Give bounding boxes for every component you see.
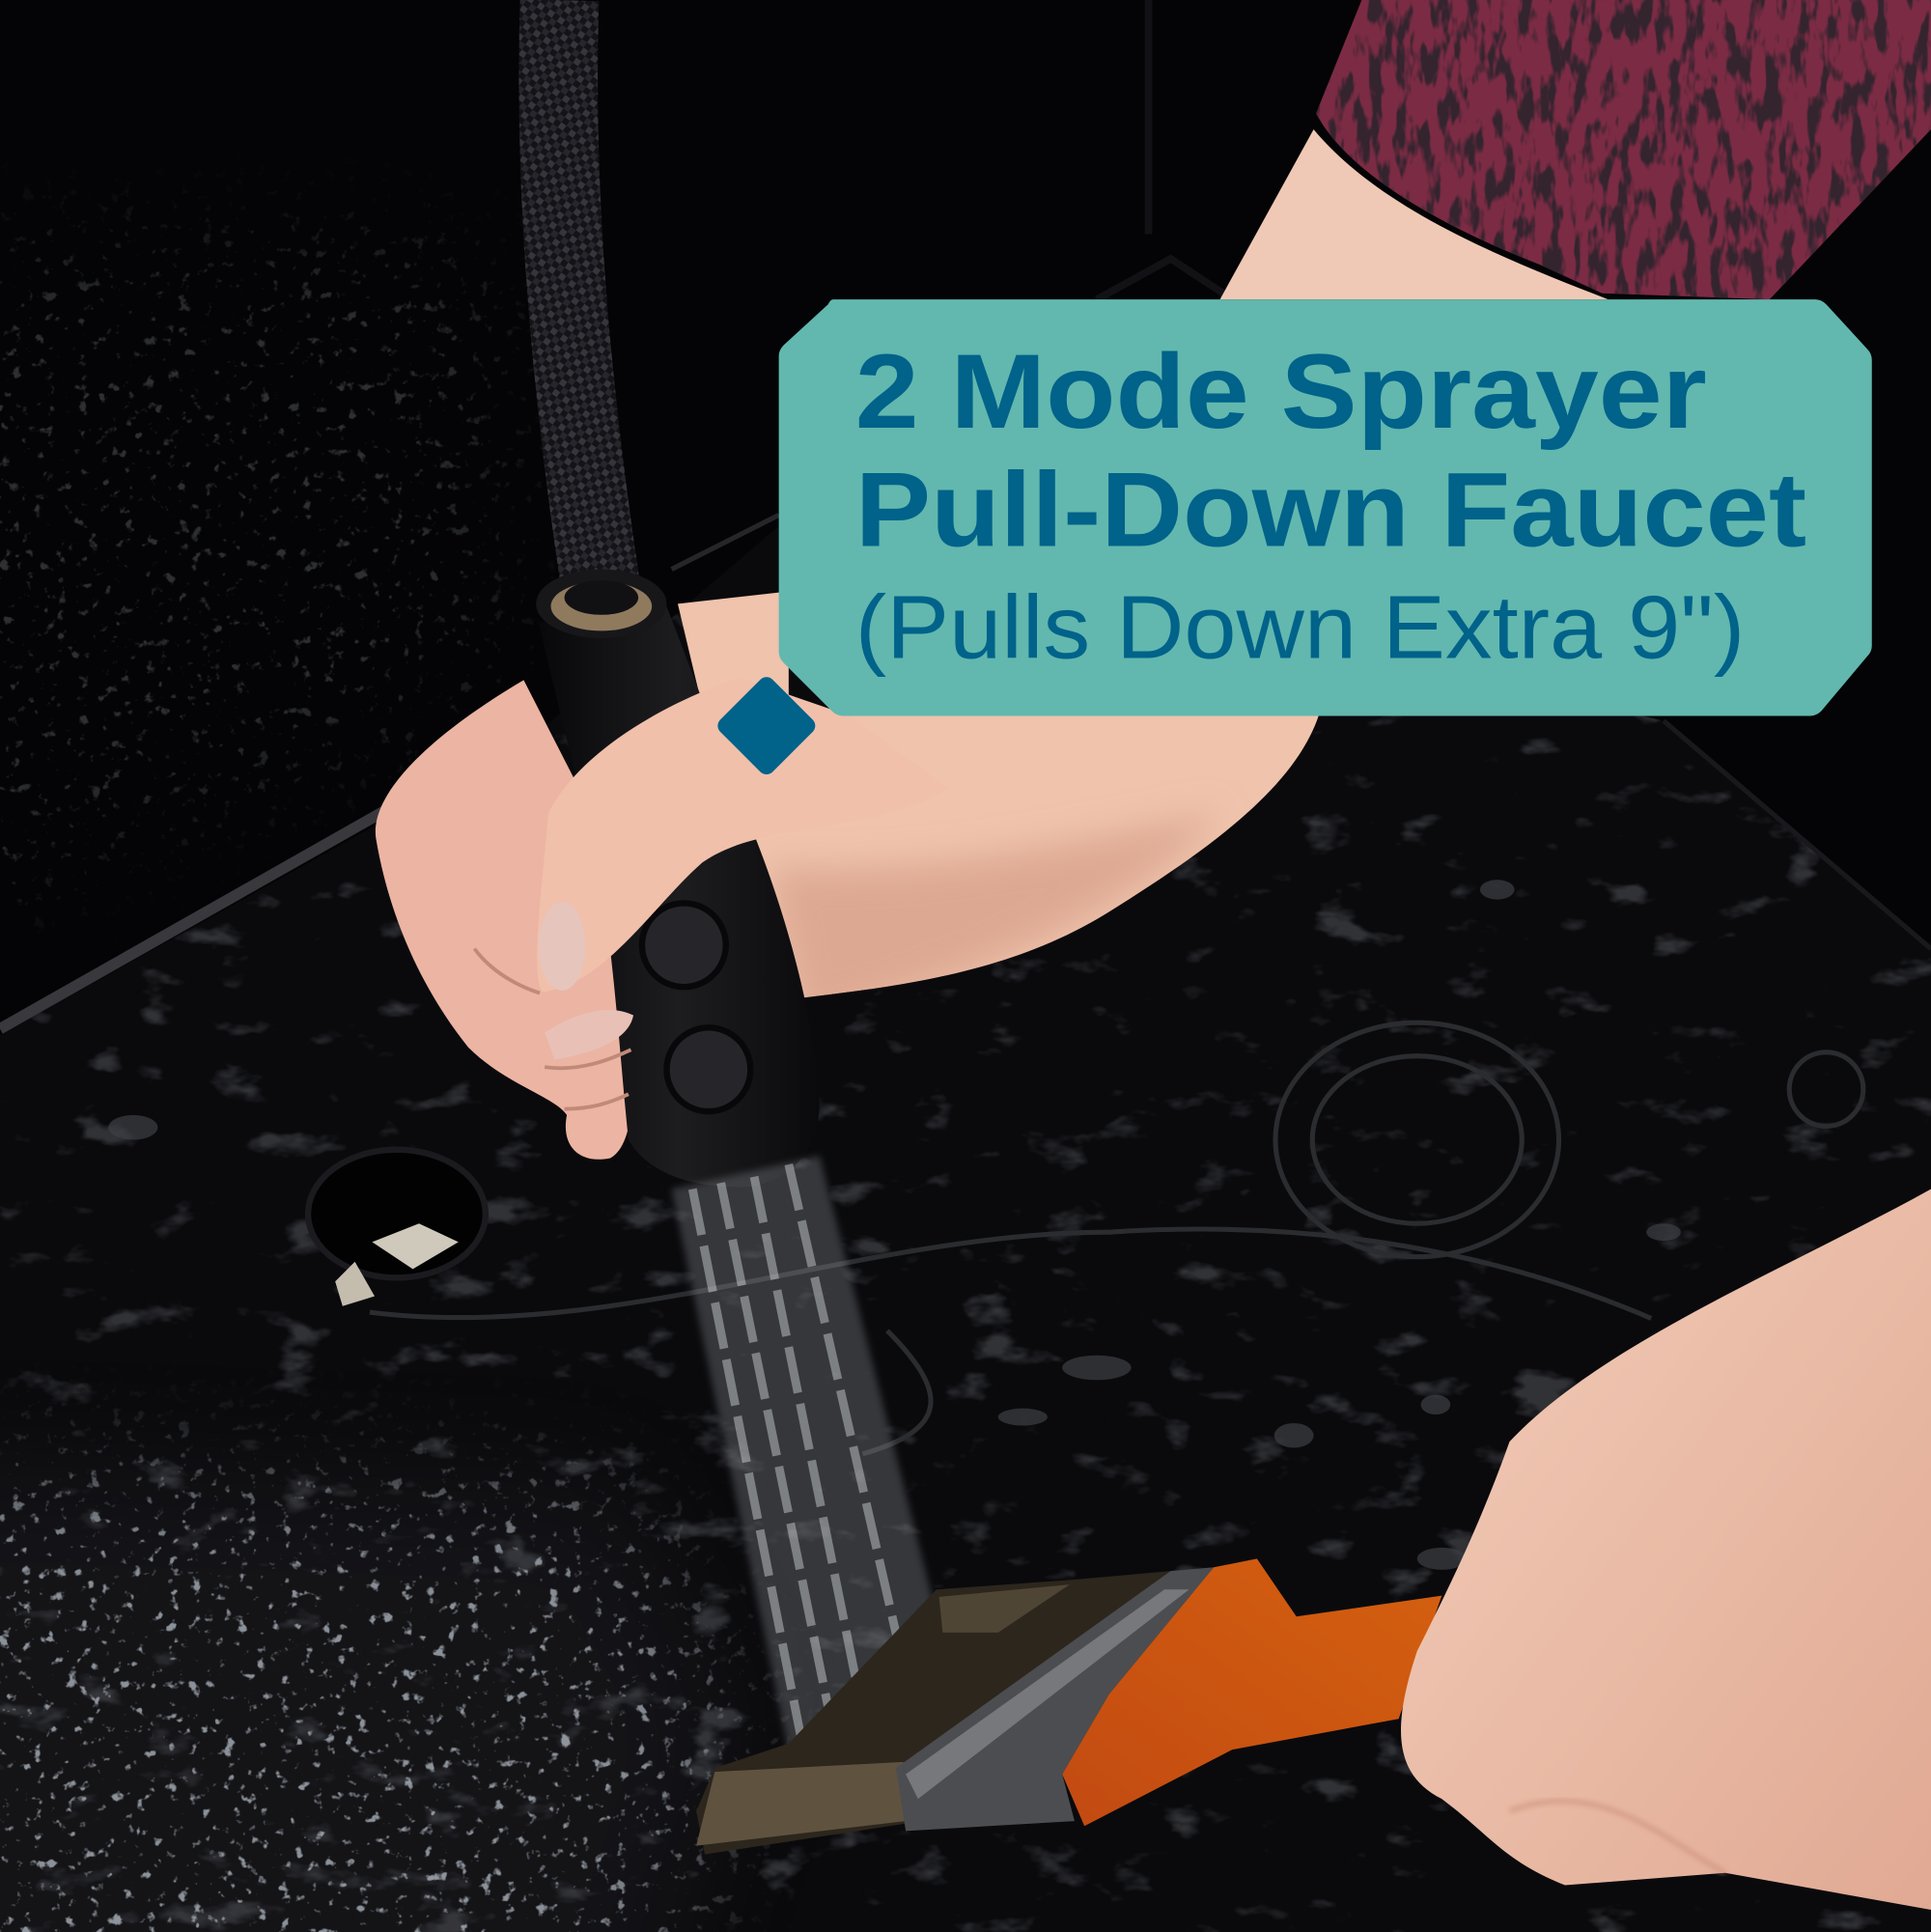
callout badge [779, 299, 1872, 715]
sink corner [1097, 0, 1232, 299]
foamy water lower left [0, 1394, 790, 1932]
metal ferrule [896, 1567, 1214, 1831]
orange handle [1062, 1558, 1441, 1826]
water ripples on floor [0, 518, 1931, 1932]
bristles [696, 1571, 1171, 1855]
button: spray mode [642, 903, 726, 987]
wall droplets [0, 203, 537, 920]
callout heading line 2: Pull-Down Faucet [855, 451, 1806, 569]
water spray [672, 1156, 942, 1750]
sink basin floor [0, 518, 1931, 1932]
thumb [474, 678, 949, 1109]
drain [308, 1150, 486, 1306]
forearm and hand back [376, 129, 1609, 1160]
bubbles [108, 880, 1681, 1570]
callout heading line 1: 2 Mode Sprayer [855, 333, 1707, 451]
sprayer head [536, 570, 820, 1187]
ripple rings [370, 1022, 1863, 1454]
paint brush [696, 1558, 1441, 1855]
button: stream mode [666, 1027, 750, 1111]
sleeve [1294, 0, 1931, 308]
sink edge highlight [0, 721, 543, 1029]
callout subheading: (Pulls Down Extra 9") [855, 576, 1745, 677]
callout diamond marker [714, 674, 819, 778]
curled fingers [376, 680, 636, 1160]
spray hose [558, 0, 602, 592]
lower hand [1401, 1189, 1931, 1910]
